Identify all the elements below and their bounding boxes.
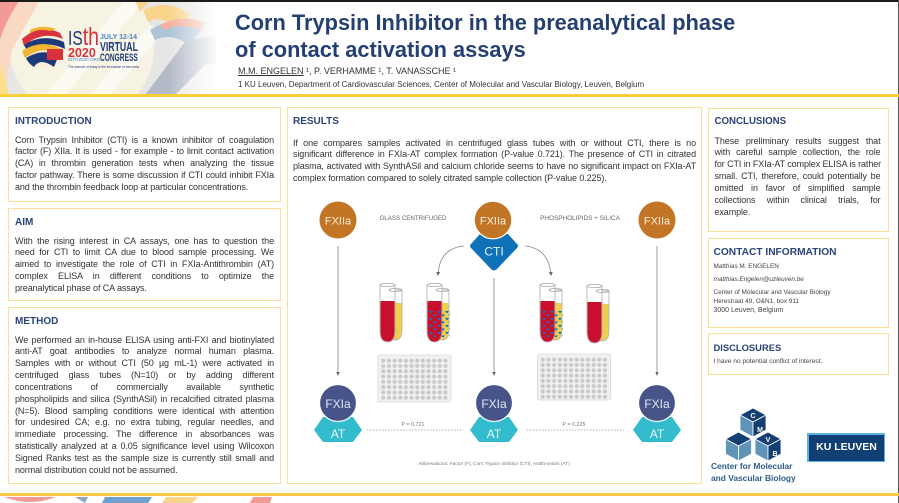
title: of contact activation assays: [235, 37, 526, 62]
disclosures text: I have no potential conflict of interest.: [714, 358, 822, 365]
aim text: [15, 236, 274, 293]
top rule: [0, 0, 899, 2]
contact address: 3000 Leuven, Belgium: [714, 307, 783, 314]
complex: FXIa-AT right: FXIa: [644, 397, 670, 411]
complex: FXIa-AT left: AT: [331, 427, 346, 441]
method text: statistically analyzed at a 0.05 significance level using Wilcoxon: [15, 441, 274, 451]
logo: CMVB cubes: B: [772, 451, 778, 458]
conference banner: [0, 2, 214, 94]
title: [235, 10, 735, 62]
method text: (N=5). Blood sampling conditions were identical with attention: [15, 406, 274, 416]
logo: KU Leuven: [807, 433, 885, 462]
contact address: Center of Molecular and Vascular Biology: [714, 289, 831, 296]
panel: method: [8, 307, 281, 484]
contact name: Matthias M. ENGELEN: [714, 262, 779, 270]
results text: [293, 138, 696, 183]
conference logotype: ISTH2020.ORG: [68, 57, 100, 62]
conference logotype: [68, 23, 139, 69]
abbreviations note: Abbreviations: Factor (F), Corn Trypsin Inhibitor (CTI), Antithrombin (AT): [418, 461, 570, 467]
comparison: P 0.225: [527, 422, 624, 430]
aim text: aimed to investigate the role of CTI in FXIa-Antithrombin (AT): [15, 259, 274, 269]
results text: plasma, activated with SynthASil and calcium chloride seems to have no significant impact on FXIa-AT: [293, 161, 696, 171]
well plate right: [538, 354, 610, 400]
aim text: need for CTI to limit CA due to blood sample processing. We: [15, 247, 274, 257]
right edge rule: [898, 0, 899, 503]
contact email: matthias.Engelen@uzleuven.be: [714, 276, 804, 282]
complex: FXIa-AT left: [314, 384, 362, 442]
conclusions text: These preliminary results suggest that: [714, 136, 880, 146]
comparison: P 0.721: P = 0.721: [401, 422, 425, 428]
heading: introduction: INTRODUCTION: [15, 116, 92, 127]
complex: FXIa-AT right: [633, 384, 681, 442]
affiliation: 1 KU Leuven, Department of Cardiovascular Sciences, Center of Molecular and Vascular Biology, Leuven, Belgium: [238, 80, 644, 88]
authors: M.M. ENGELEN ¹, P. VERHAMME ¹, T. VANASSCHE ¹: [238, 66, 456, 76]
panel: conclusions: [708, 108, 888, 232]
logo: CMVB cubes: [726, 408, 781, 460]
method text: We performed an in-house ELISA using anti-FXI and biotinylated: [15, 334, 274, 344]
heading: method: METHOD: [15, 316, 58, 327]
results text: If one compares samples activated in centrifuged glass tubes with or without CTI, there is no: [293, 138, 696, 148]
icon: FXIIa right: [638, 202, 676, 238]
conference logotype: JULY 12-14: [100, 34, 137, 41]
icon: ISTH globe: [22, 26, 65, 67]
method text: normal distribution could not be assumed.: [15, 465, 178, 475]
complex: FXIa-AT right: AT: [650, 427, 665, 441]
aim text: With the rising interest in CA assays, one has to question the: [15, 236, 274, 246]
results text: complex formation compared to solely citrated sample collection (P-value 0.225).: [293, 173, 607, 183]
introduction text: factor (F) XIIa. It is used - for example - to limit contact activation: [15, 146, 274, 156]
introduction text: factor pathway. There is some discussion if CTI could inhibit FXIa: [15, 170, 274, 180]
footer stripes: [4, 497, 272, 503]
method text: phospholipids and silica (SynthASil) in recalcified citrated plasma: [15, 394, 274, 404]
diagram: contact activation workflow: [314, 202, 681, 467]
panel: aim: [8, 208, 281, 301]
conclusions text: [714, 136, 881, 217]
arrow: centre column: [492, 278, 496, 376]
method text: anti-AT goat antibodies to analyze normal human plasma.: [15, 346, 274, 356]
heading: disclosures: DISCLOSURES: [714, 342, 781, 353]
tubes: phospholipids with CTI: [540, 283, 563, 342]
contact address: [714, 289, 831, 314]
icon: FXIIa right: FXIIa: [644, 216, 671, 228]
tubes: glass without CTI: [380, 283, 402, 342]
arrow: left column: [336, 246, 340, 376]
logo: CMVB cubes: M: [757, 427, 763, 434]
logo caption: Center for Molecular: [711, 461, 792, 471]
conference logotype: VIRTUAL: [100, 40, 138, 54]
heading: contact information: CONTACT INFORMATION: [714, 247, 836, 258]
conclusions text: example.: [714, 207, 750, 217]
well plate left: [378, 355, 451, 402]
heading: conclusions: CONCLUSIONS: [714, 116, 786, 127]
introduction text: (CA) in thrombin generation tests when analyzing the tissue: [15, 158, 274, 168]
method text: for undesired CA; e.g. no extra tubing, regular needles, and: [15, 417, 274, 427]
icon: CTI diamond: [470, 234, 518, 270]
introduction text: and the thrombin feedback loop at particular concentrations.: [15, 182, 248, 192]
comparison: P 0.721: [367, 422, 463, 430]
title: Corn Trypsin Inhibitor in the preanalytical phase: [235, 10, 735, 35]
footer rule: [0, 493, 899, 496]
method text: Signed Ranks test as the sample size is currently still small and: [15, 453, 274, 463]
method text: concentrations of commercially available synthetic: [15, 382, 274, 392]
icon: FXIIa left: FXIIa: [325, 216, 352, 228]
aim text: preanalytical phase of CA assays.: [15, 283, 147, 293]
complex: FXIa-AT centre: AT: [487, 427, 502, 441]
conclusions text: collections within clinical trials, for: [714, 195, 880, 205]
label: glass centrifuged: GLASS CENTRIFUGED: [379, 215, 447, 222]
panel: disclosures: [708, 333, 888, 375]
complex: FXIa-AT centre: FXIa: [481, 397, 507, 411]
header divider: [0, 94, 899, 97]
tubes: glass with CTI: [427, 283, 450, 342]
icon: FXIIa left: [320, 202, 356, 238]
results text: significant difference in FXIa-AT complex formation (P-value 0.721). The presence of CTI in citrated: [293, 149, 696, 159]
arrow: CTI to right tubes: [525, 246, 551, 274]
conference logotype: The science of today is the innovation of tomorrow: [68, 65, 139, 69]
panel: results: [287, 107, 702, 484]
conclusions text: small. CTI, therefore, could potentially be: [714, 171, 880, 181]
conclusions text: for CTI in FXIa-AT complex ELISA is rather: [714, 159, 881, 169]
conference logotype: CONGRESS: [100, 52, 138, 64]
panel: introduction: [8, 107, 281, 202]
logo caption: and Vascular Biology: [711, 473, 796, 483]
logo: CMVB cubes: C: [750, 413, 756, 420]
tubes: phospholipids without CTI: [587, 284, 609, 343]
arrow: CTI to left tubes: [438, 246, 464, 274]
method text: immediate processing. The difference in absorbances was: [15, 429, 274, 439]
introduction text: [15, 134, 274, 192]
method text: [15, 334, 274, 475]
conclusions text: with careful sample collection, the role: [714, 147, 880, 157]
label: phospholipids + silica: PHOSPHOLIPIDS + SILICA: [540, 215, 621, 222]
icon: FXIIa centre: FXIIa: [480, 216, 507, 228]
complex: FXIa-AT centre: [470, 384, 518, 442]
logo: KU Leuven: KU LEUVEN: [816, 441, 877, 453]
conclusions text: omitted in favor of simplified sample: [714, 183, 880, 193]
icon: CTI diamond: CTI: [484, 244, 504, 258]
contact address: Herestraat 49, O&N1, box 911: [714, 298, 799, 305]
arrow: right column: [655, 246, 659, 376]
logo caption: [711, 461, 796, 483]
icon: FXIIa centre: [474, 201, 512, 239]
heading: results: RESULTS: [293, 116, 339, 127]
complex: FXIa-AT left: FXIa: [325, 397, 351, 411]
introduction text: Corn Trypsin Inhibitor (CTI) is a known inhibitor of coagulation: [15, 134, 274, 144]
method text: centrifuged glass tubes (N=10) or by adding different: [15, 370, 274, 380]
logo: CMVB cubes: V: [766, 437, 771, 444]
heading: aim: AIM: [15, 217, 33, 228]
conference logotype: ISth: [68, 23, 99, 51]
panel: contact information: [708, 238, 888, 328]
method text: Samples with or without CTI (50 µg mL-1) were activated in: [15, 358, 274, 368]
aim text: complex ELISA in different conditions to optimize the: [15, 271, 274, 281]
conference logotype: 2020: [68, 46, 96, 60]
comparison: P 0.225: P = 0.225: [562, 422, 586, 428]
